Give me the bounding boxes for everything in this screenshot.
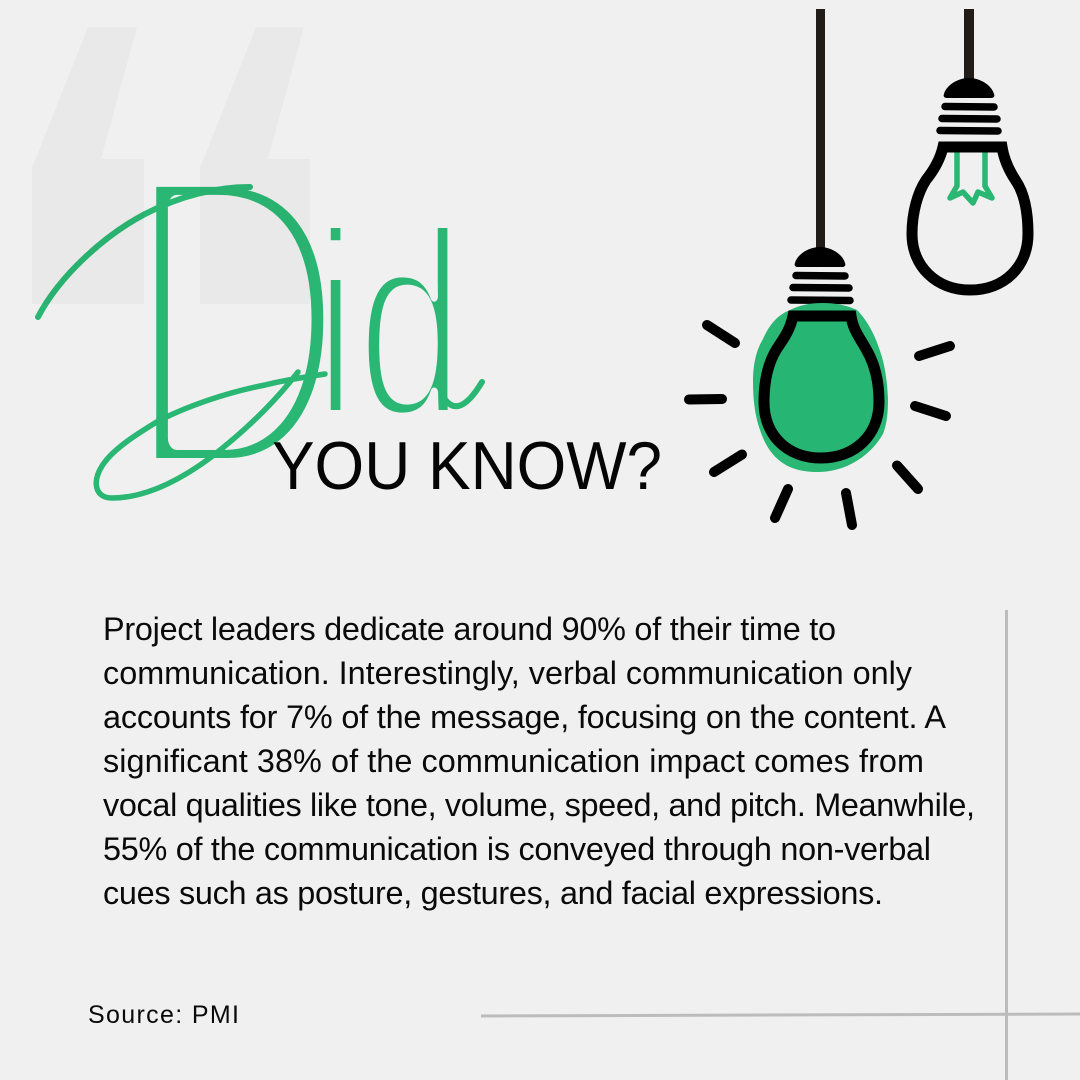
heading: YOU KNOW?: YOU KNOW? xyxy=(272,428,662,504)
body text block xyxy=(103,611,975,911)
icon: lit green light bulb xyxy=(753,9,888,472)
flourish: heading lower loop xyxy=(96,372,325,498)
decorative quotation mark xyxy=(32,27,310,304)
horizontal rule xyxy=(481,1014,1080,1016)
flourish: heading entry swash xyxy=(38,187,250,317)
body text block: significant 38% of the communication impact comes from xyxy=(103,743,924,779)
icon: light rays around bulb xyxy=(689,325,950,525)
flourish: heading tail xyxy=(444,382,482,406)
body text block: communication. Interestingly, verbal communication only xyxy=(103,655,913,691)
heading: Did: D xyxy=(122,83,347,562)
body text block: accounts for 7% of the message, focusing on the content. A xyxy=(103,699,946,735)
body text block: Project leaders dedicate around 90% of their time to xyxy=(103,611,836,647)
vertical rule xyxy=(1005,610,1008,1080)
icon: unlit outline light bulb xyxy=(912,9,1028,290)
source note: Source: PMI xyxy=(88,1001,239,1029)
body text block: 55% of the communication is conveyed through non-verbal xyxy=(103,831,931,867)
body text block: vocal qualities like tone, volume, speed, and pitch. Meanwhile, xyxy=(103,787,975,823)
body text block: cues such as posture, gestures, and facial expressions. xyxy=(103,875,883,911)
heading: Did: id xyxy=(314,176,464,472)
